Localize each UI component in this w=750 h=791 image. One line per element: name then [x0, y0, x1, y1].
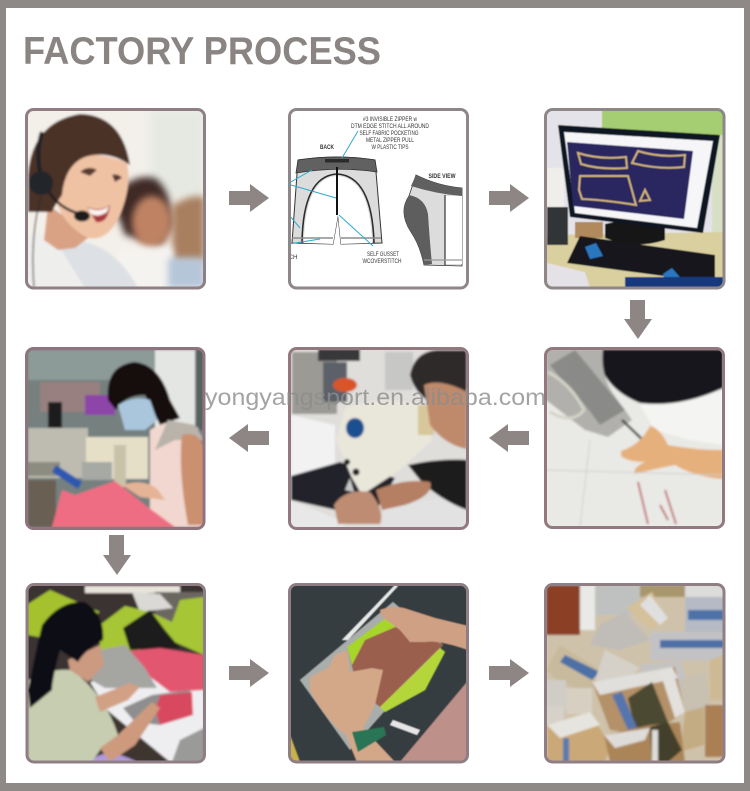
photo border: [290, 584, 468, 762]
drawing notes: CH: [288, 254, 298, 261]
drawing notes: [288, 116, 456, 265]
arrow: down: [624, 300, 652, 339]
drawing notes: METAL ZIPPER PULL: [366, 137, 414, 144]
photo border: [27, 584, 204, 762]
photo border: [546, 584, 724, 762]
panel: quality check of garments: [27, 584, 205, 762]
arrow: right: [229, 659, 269, 687]
shorts side view: [404, 175, 462, 266]
arrow: right: [229, 184, 269, 212]
panel: packing in plastic bag: [289, 584, 468, 762]
drawing notes: DTM EDGE STITCH ALL AROUND: [351, 123, 429, 130]
drawing notes: SELF GUSSET: [367, 251, 399, 258]
drawing notes: WCOVERSTITCH: [362, 258, 402, 265]
drawing notes: SIDE VIEW: [428, 173, 456, 180]
title: FACTORY PROCESS: [23, 30, 381, 73]
panel: stacked shipping cartons: [546, 584, 724, 762]
arrow: down: [103, 535, 131, 575]
photo border: [290, 110, 468, 288]
arrow: left: [229, 424, 269, 452]
photo border: [546, 110, 724, 288]
blue callout lines: [289, 131, 373, 246]
photo border: [26, 348, 204, 528]
photo border: [546, 348, 724, 528]
shorts back view: [292, 157, 382, 244]
panel: shorts tech drawing: [288, 109, 468, 288]
drawing notes: #3 INVISIBLE ZIPPER w: [363, 116, 417, 123]
drawing notes: BACK: [320, 144, 334, 151]
photo border: [26, 110, 204, 288]
photo border: [290, 348, 468, 528]
arrow: right: [489, 659, 529, 687]
drawing notes: SELF FABRIC POCKETING: [360, 130, 419, 137]
panel: customer service photo: [26, 109, 205, 288]
arrow: right: [489, 184, 529, 212]
panel: cutting machine and hand: [546, 348, 724, 528]
drawing notes: W PLASTIC TIPS: [372, 144, 408, 151]
panel: sewing machine operator: [289, 348, 468, 529]
arrow: left: [489, 424, 529, 452]
panel: CAD pattern on computer: [546, 109, 724, 288]
watermark: yongyangsport.en.alibaba.com: [205, 384, 546, 410]
panel: seamstress in mask: [26, 348, 204, 529]
